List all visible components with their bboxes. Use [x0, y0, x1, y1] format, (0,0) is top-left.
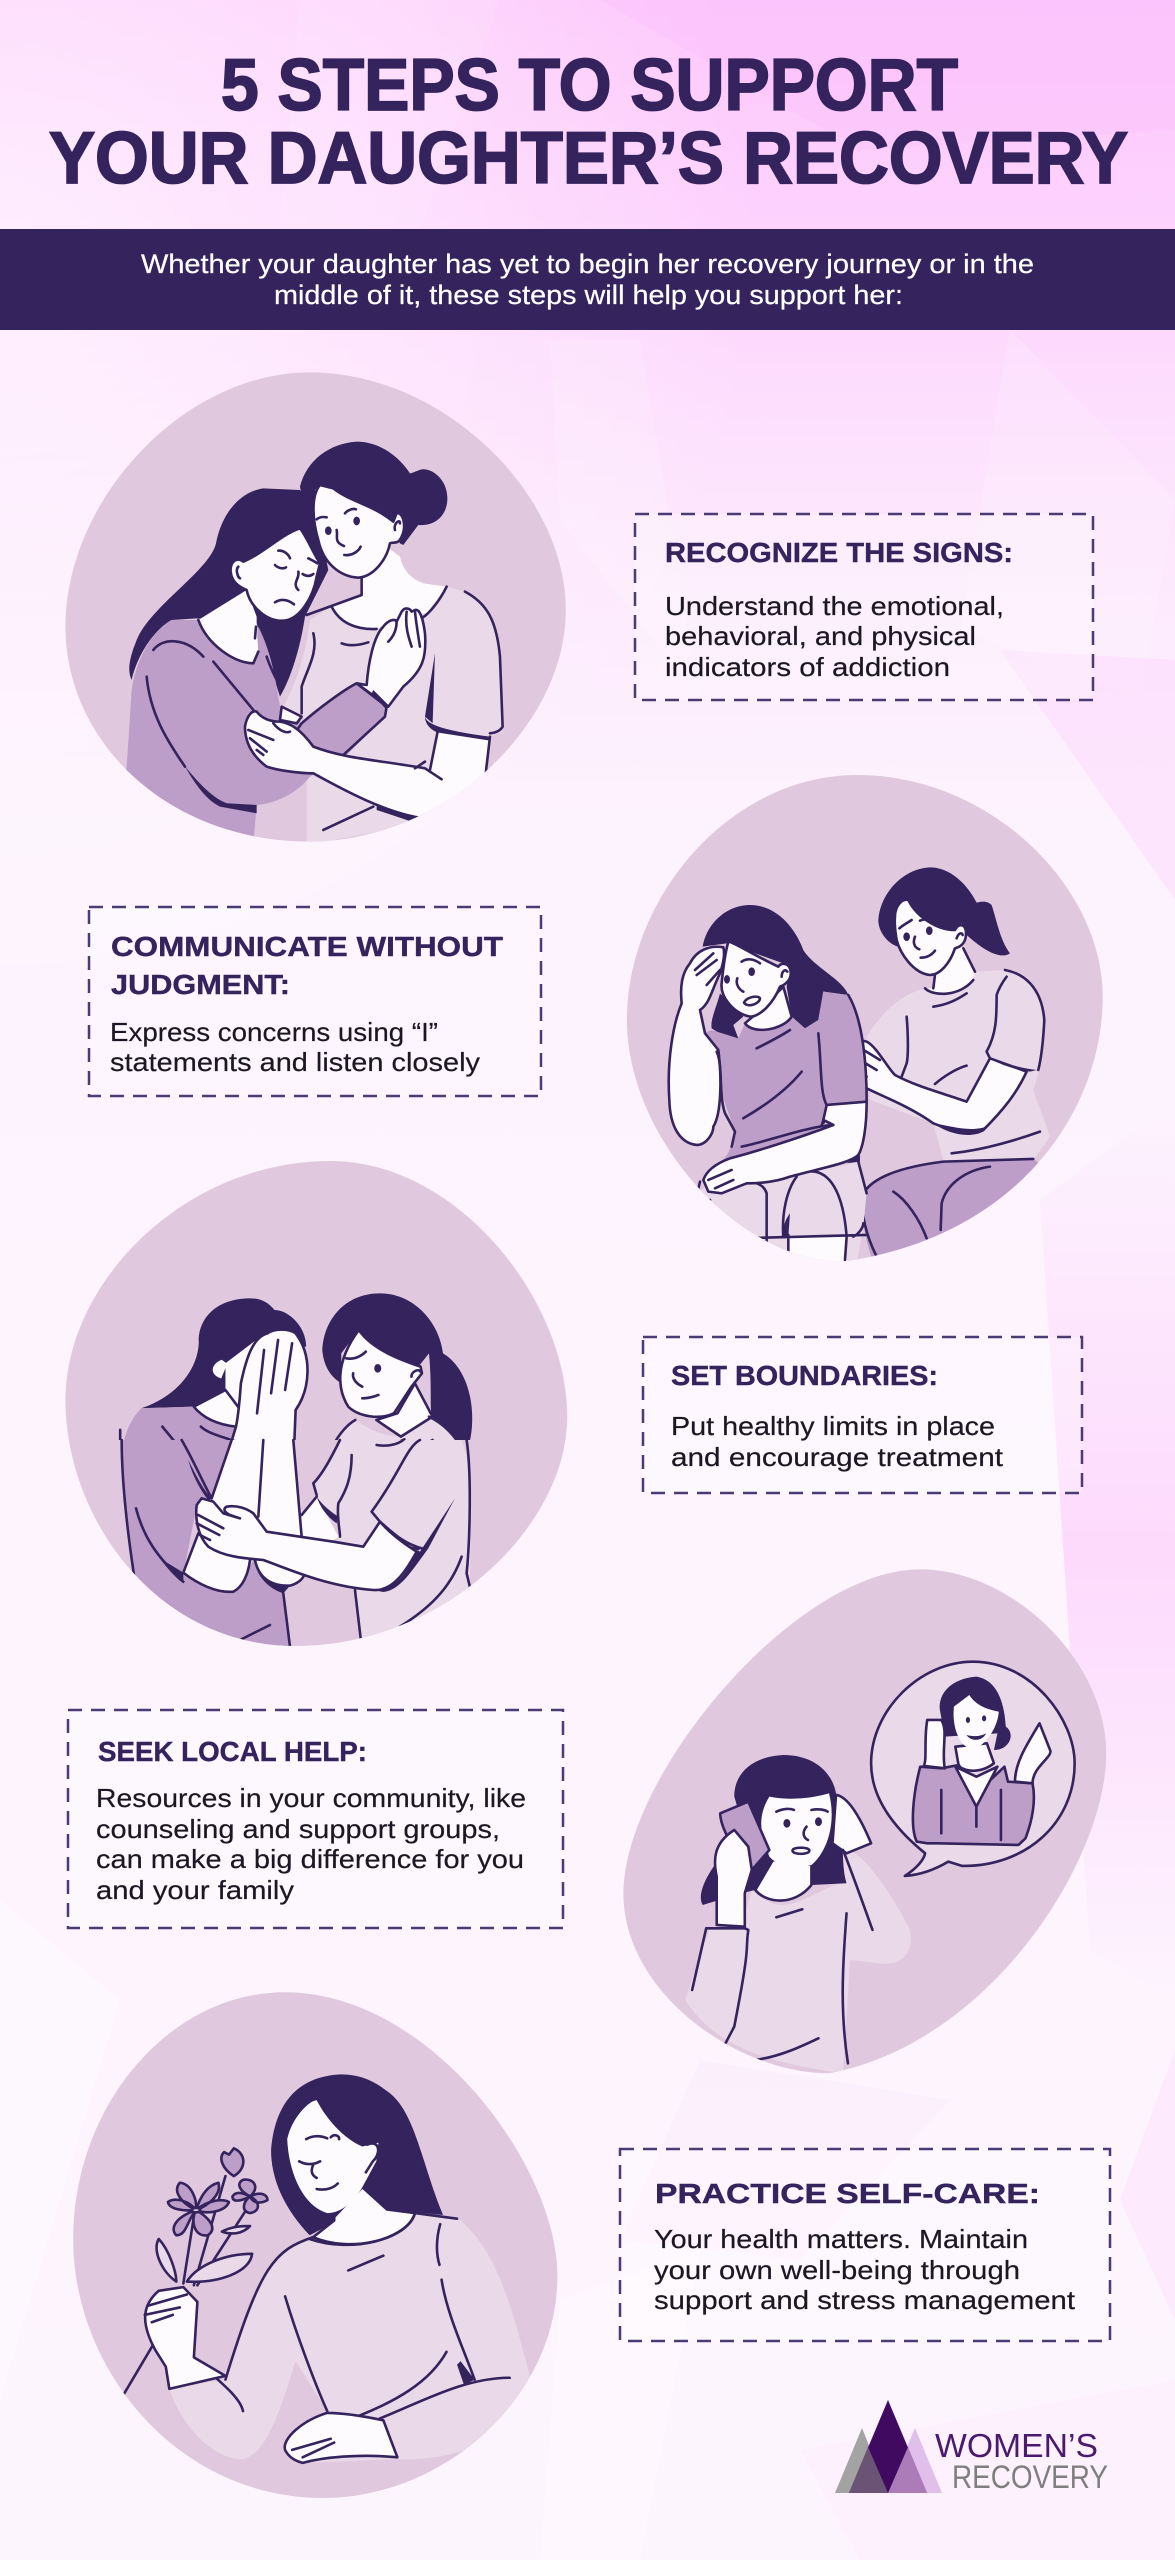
card: recognize the signs: RECOGNIZE THE SIGNS:: [665, 537, 1013, 568]
intro band: middle of it, these steps will help you support her:: [274, 280, 903, 310]
logo: Women's Recovery: [835, 2400, 1108, 2495]
logo: Women's Recovery: RECOVERY: [952, 2459, 1108, 2495]
card: seek local help: and your family: [96, 1875, 294, 1905]
title: YOUR DAUGHTER’S RECOVERY: [49, 118, 1128, 199]
intro band: [0, 229, 1175, 330]
card: seek local help: [68, 1710, 563, 1928]
card: recognize the signs: Understand the emotional,: [665, 591, 1004, 621]
card: set boundaries: [643, 1337, 1082, 1493]
card: recognize the signs: indicators of addiction: [665, 652, 950, 682]
card: set boundaries: Put healthy limits in place: [671, 1411, 995, 1441]
title: [49, 45, 1128, 199]
card: set boundaries: and encourage treatment: [671, 1442, 1004, 1472]
card: seek local help: counseling and support groups,: [96, 1814, 500, 1844]
card: communicate without judgment: JUDGMENT:: [111, 969, 290, 1000]
intro band: Whether your daughter has yet to begin her recovery journey or in the: [141, 249, 1034, 279]
card: recognize the signs: [635, 514, 1093, 700]
illustration 3: daughter crying with mother: [65, 1161, 567, 1647]
card: set boundaries: SET BOUNDARIES:: [671, 1360, 938, 1391]
illustration 4: phone call for help: [623, 1569, 1106, 2073]
logo mark: [835, 2400, 942, 2493]
card: seek local help: Resources in your community, like: [96, 1783, 526, 1813]
card: communicate without judgment: [89, 907, 541, 1096]
card: seek local help: can make a big difference for you: [96, 1844, 524, 1874]
card: communicate without judgment: Express concerns using “I”: [110, 1017, 438, 1047]
card: communicate without judgment: statements and listen closely: [110, 1047, 480, 1077]
card: practice self-care: PRACTICE SELF-CARE:: [655, 2178, 1040, 2209]
illustration 5: woman smelling flowers: [73, 1992, 557, 2498]
card: practice self-care: your own well-being through: [654, 2255, 1020, 2285]
card: recognize the signs: behavioral, and physical: [665, 621, 976, 651]
card: communicate without judgment: COMMUNICATE WITHOUT: [111, 931, 503, 962]
illustration 2: mother comforting seated daughter: [627, 775, 1103, 1263]
card: seek local help: SEEK LOCAL HELP:: [98, 1736, 367, 1767]
title: 5 STEPS TO SUPPORT: [221, 45, 958, 126]
card: practice self-care: [620, 2149, 1110, 2341]
logo: Women's Recovery: WOMEN’S: [935, 2427, 1098, 2464]
illustration 1: mother hugging daughter: [65, 372, 566, 845]
card: practice self-care: support and stress management: [654, 2285, 1076, 2315]
card: practice self-care: Your health matters. Maintain: [654, 2224, 1028, 2254]
